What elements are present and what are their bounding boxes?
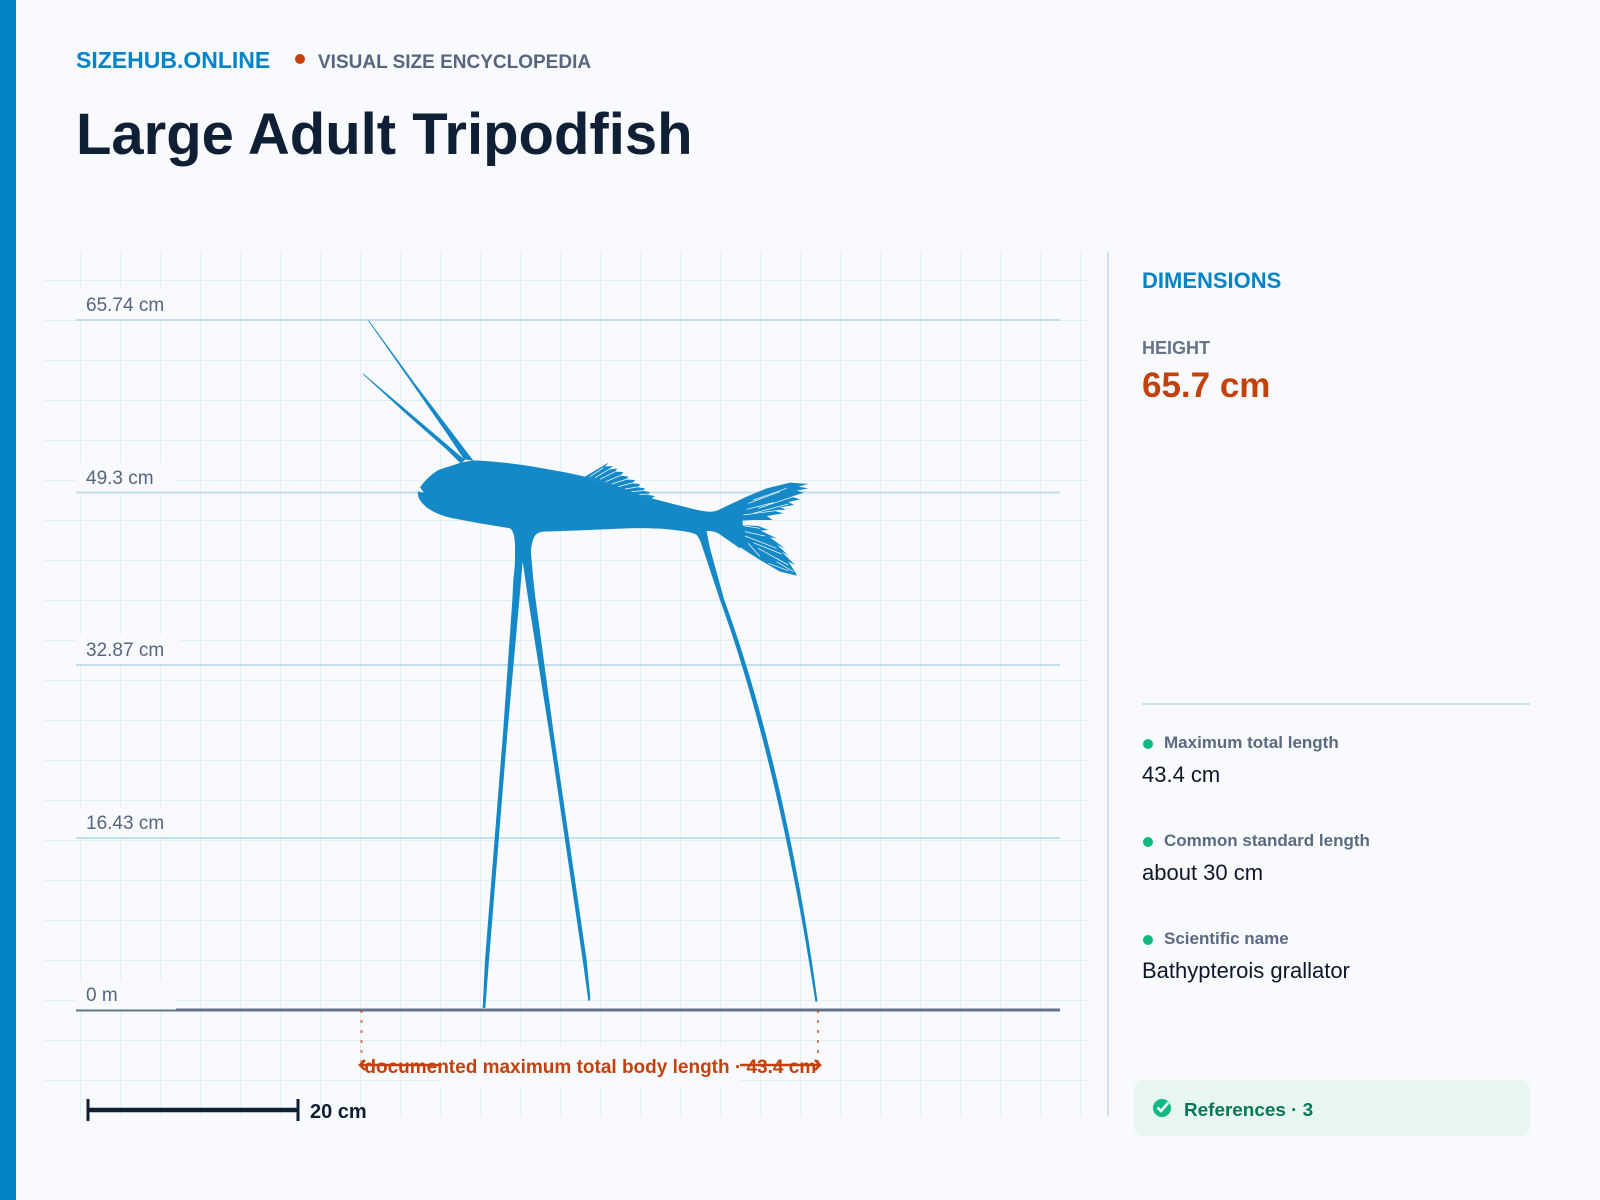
reference line: 49.3 cm: 49.3 cm [86, 468, 154, 489]
references badge [1134, 1080, 1530, 1136]
references badge: References · 3 [1184, 1100, 1313, 1121]
length dimension annotation [360, 1010, 820, 1087]
tail fin [718, 483, 808, 576]
fact: common standard length: Common standard length [1164, 831, 1370, 850]
body and legs [418, 460, 817, 1008]
fact: common standard length [1142, 831, 1370, 885]
height stat: 65.7 cm [1142, 366, 1270, 405]
panel: dimensions [1107, 252, 1530, 1136]
fact: maximum total length [1142, 733, 1339, 787]
dorsal fin [585, 463, 655, 498]
fact: maximum total length: Maximum total length [1164, 733, 1339, 752]
header brand line [76, 47, 591, 73]
fact: common standard length: about 30 cm [1142, 860, 1263, 885]
tripodfish silhouette [363, 321, 817, 1008]
long fin spines [363, 321, 473, 463]
accent bar [0, 0, 16, 1200]
ground line: 0 m: 0 m [86, 985, 118, 1006]
header brand line: VISUAL SIZE ENCYCLOPEDIA [318, 52, 591, 73]
icon: check circle [1153, 1099, 1171, 1117]
reference line: 32.87 cm [76, 635, 1060, 666]
reference line: 32.87 cm: 32.87 cm [86, 640, 164, 661]
scale bar: 20 cm: 20 cm [310, 1101, 367, 1123]
fact: scientific name [1142, 929, 1350, 983]
fact: scientific name: Bathypterois grallator [1142, 958, 1350, 983]
title: Large Adult Tripodfish [76, 102, 693, 167]
fact: maximum total length: 43.4 cm [1142, 762, 1220, 787]
header brand line: SIZEHUB.ONLINE [76, 47, 270, 73]
reference line: 16.43 cm: 16.43 cm [86, 813, 164, 834]
reference line: 49.3 cm [76, 462, 1060, 494]
reference line: 65.74 cm: 65.74 cm [86, 295, 164, 316]
ground line: 0 m [76, 980, 1060, 1012]
reference line: 16.43 cm [76, 808, 1060, 839]
height stat [1142, 338, 1270, 405]
fact: scientific name: Scientific name [1164, 929, 1289, 948]
panel heading: DIMENSIONS [1142, 268, 1281, 293]
chart: height scale [76, 290, 1060, 1012]
scale bar: 20 cm [88, 1099, 367, 1123]
length dimension annotation: documented maximum total body length · 43.4 cm [364, 1057, 816, 1078]
height stat: HEIGHT [1142, 338, 1210, 358]
reference line: 65.74 cm [76, 290, 1060, 321]
